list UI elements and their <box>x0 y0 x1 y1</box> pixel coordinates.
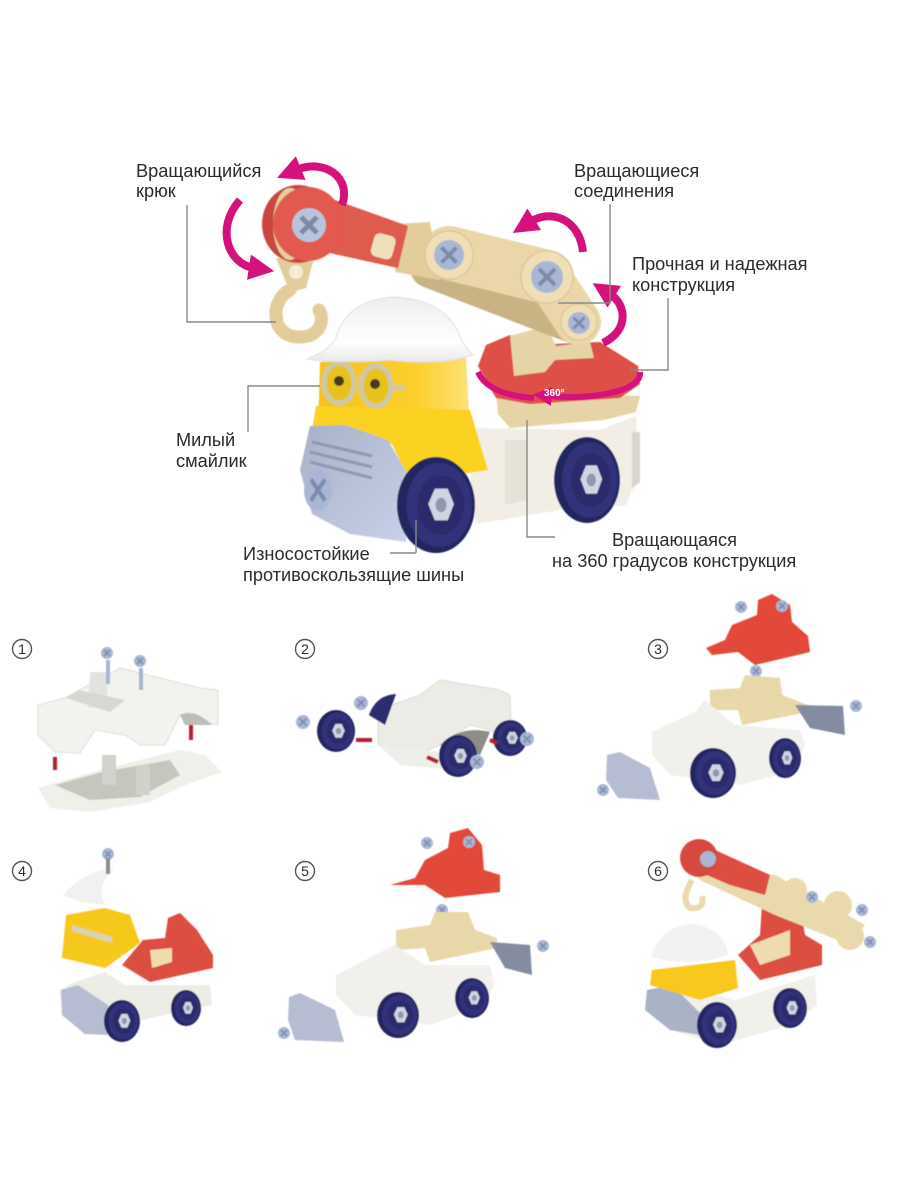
step 3 <box>597 594 862 800</box>
magenta arrows <box>227 166 640 398</box>
text: 5 <box>301 863 309 879</box>
360 degree label: 360° <box>544 388 565 399</box>
step numbers <box>12 640 668 880</box>
labels: противоскользящие шины <box>243 565 464 585</box>
labels: Износостойкие <box>243 544 370 564</box>
truck rear white body <box>470 416 640 524</box>
helmet <box>307 297 473 362</box>
step 6 <box>645 839 876 1048</box>
labels <box>136 161 808 585</box>
tan base plate <box>496 392 640 428</box>
labels: соединения <box>574 181 674 201</box>
labels: конструкция <box>632 275 735 295</box>
crane boom <box>395 222 597 340</box>
labels: Вращающийся <box>136 161 261 181</box>
hook disc <box>262 185 343 263</box>
cab yellow upper <box>318 358 470 432</box>
text: 4 <box>18 863 26 879</box>
red arm <box>325 200 408 268</box>
labels: на 360 градусов конструкция <box>552 551 796 571</box>
text: 1 <box>18 641 26 657</box>
goggles and eyes <box>324 363 405 406</box>
labels: Вращающаяся <box>612 530 737 550</box>
step 2 <box>296 680 534 777</box>
cab yellow lower <box>312 406 488 482</box>
text: 3 <box>654 641 662 657</box>
front wheel <box>397 457 475 553</box>
leader lines <box>187 204 668 553</box>
red turntable <box>478 335 640 404</box>
text: 2 <box>301 641 309 657</box>
labels: Прочная и надежная <box>632 254 808 274</box>
rear wheel <box>554 437 620 523</box>
step 1 <box>38 647 222 812</box>
main crane truck illustration <box>262 185 640 553</box>
tan pedestal <box>510 326 594 376</box>
labels: Вращающиеся <box>574 161 699 181</box>
hook <box>276 258 321 337</box>
side bolt <box>304 469 332 511</box>
step 5 <box>278 828 549 1042</box>
step 4 <box>60 848 213 1042</box>
labels: смайлик <box>176 451 248 471</box>
labels: Милый <box>176 430 235 450</box>
front grille body <box>300 425 412 542</box>
labels: крюк <box>136 181 177 201</box>
text: 6 <box>654 863 662 879</box>
